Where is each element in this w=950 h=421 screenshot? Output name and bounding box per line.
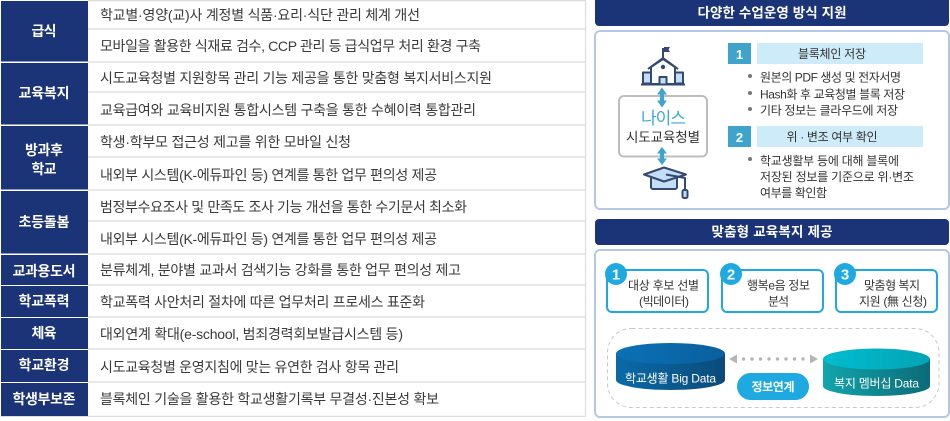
item 2 bullets: 학교생활부 등에 대해 블록에 — [760, 154, 899, 168]
category: 교과용도서: 교과용도서 — [12, 263, 76, 279]
arrow: dotted two-way — [729, 354, 818, 364]
category: 학생부보존 — [1, 383, 88, 416]
table row texts: 학교폭력 사안처리 절차에 따른 업무처리 프로세스 표준화 — [100, 294, 425, 310]
table row texts: 학생·학부모 접근성 제고를 위한 모바일 신청 — [100, 134, 351, 150]
table row texts: 시도교육청별 운영지침에 맞는 유연한 검사 항목 관리 — [100, 359, 399, 375]
category: 학교폭력 — [1, 286, 88, 317]
step 1 — [605, 263, 708, 312]
table row texts — [100, 7, 492, 407]
item 2 title: 위·변조 여부 확인: 2 — [736, 130, 743, 145]
icon: graduation cap — [644, 168, 688, 198]
table row texts: 모바일을 활용한 식재료 검수, CCP 관리 등 급식업무 처리 환경 구축 — [100, 38, 481, 54]
arrow: up and down upper — [657, 88, 667, 108]
box: 나이스 시도교육청별: 나이스 — [641, 109, 686, 128]
category: 학교환경 — [1, 350, 88, 382]
category: 초등돌봄 — [1, 191, 88, 254]
item 2 bullets — [748, 154, 914, 200]
table row texts: 내외부 시스템(K-에듀파인 등) 연계를 통한 업무 편의성 제공 — [100, 231, 437, 247]
category: 급식: 급식 — [32, 23, 56, 39]
step 2: 행복e음 정보 — [747, 278, 810, 292]
category: 체육 — [1, 318, 88, 349]
step 3: 3 — [841, 266, 849, 284]
table row texts: 분류체계, 분야별 교과서 검색기능 강화를 통한 업무 편의성 제고 — [100, 262, 461, 278]
pill: 정보연계: 정보연계 — [752, 380, 794, 394]
heading: 맞춤형 교육복지 제공: 맞춤형 교육복지 제공 — [712, 224, 832, 240]
step 2 — [720, 263, 823, 312]
item 2 title: 위·변조 여부 확인: 위 · 변조 여부 확인 — [786, 130, 878, 144]
item 1 title: 블록체인 저장: 1 — [736, 47, 743, 62]
table row texts: 대외연계 확대(e-school, 범죄경력회보발급시스템 등) — [100, 326, 403, 342]
category: 급식 — [1, 1, 88, 62]
table row texts: 학교별·영양(교)사 계정별 식품·요리·식단 관리 체계 개선 — [100, 7, 420, 23]
table row texts: 교육급여와 교육비지원 통합시스템 구축을 통한 수혜이력 통합관리 — [100, 102, 476, 118]
item 1 bullets: 기타 정보는 클라우드에 저장 — [760, 104, 898, 118]
step 3: 맞춤형 복지 — [864, 278, 920, 292]
box: 나이스 시도교육청별 — [619, 96, 707, 156]
category: 학생부보존: 학생부보존 — [12, 391, 76, 407]
step 1: (빅데이터) — [639, 294, 689, 308]
item 1 title: 블록체인 저장: 블록체인 저장 — [798, 47, 866, 61]
step 1: 대상 후보 선별 — [628, 278, 699, 292]
panel: feature table — [1, 0, 586, 417]
cylinder: 복지 멤버십 Data — [823, 348, 930, 396]
category: 방과후 학교 — [1, 126, 88, 190]
category: 학교환경: 학교환경 — [18, 357, 70, 373]
category: 교육복지: 교육복지 — [18, 85, 70, 101]
item 2 title: 위·변조 여부 확인 — [728, 126, 923, 147]
category: 학교폭력: 학교폭력 — [18, 293, 70, 309]
step 3: 지원 (無 신청) — [859, 294, 927, 308]
pill: 정보연계 — [737, 373, 809, 400]
category: 체육: 체육 — [32, 325, 57, 341]
panel: 수업운영 방식 — [595, 31, 949, 209]
category: 초등돌봄: 초등돌봄 — [18, 214, 70, 230]
step 3 — [834, 263, 937, 312]
step 2: 2 — [727, 266, 735, 284]
cylinder: 학교생활 Big Data — [616, 343, 725, 390]
item 2 bullets: 여부를 확인함 — [760, 186, 827, 200]
category: 교육복지 — [1, 63, 88, 124]
step 2: 분석 — [768, 294, 789, 308]
icon: school — [641, 47, 685, 84]
panel: 맞춤형 교육복지 — [595, 250, 949, 417]
item 1 title: 블록체인 저장 — [728, 43, 923, 64]
item 1 bullets: 원본의 PDF 생성 및 전자서명 — [760, 70, 901, 84]
item 1 bullets: Hash화 후 교육청별 블록 저장 — [760, 88, 905, 102]
category: 방과후 학교: 학교 — [32, 161, 57, 177]
arrow: up and down lower — [657, 147, 667, 165]
cylinder: 학교생활 Big Data: 학교생활 Big Data — [625, 372, 716, 386]
item 2 bullets: 저장된 정보를 기준으로 위·변조 — [760, 170, 914, 184]
table row texts: 내외부 시스템(K-에듀파인 등) 연계를 통한 업무 편의성 제공 — [100, 167, 437, 183]
category: 방과후 학교: 방과후 — [25, 142, 63, 158]
table row texts: 시도교육청별 지원항목 관리 기능 제공을 통한 맞춤형 복지서비스지원 — [100, 70, 492, 86]
heading: 맞춤형 교육복지 제공 — [595, 219, 949, 245]
table row texts: 범정부수요조사 및 만족도 조사 기능 개선을 통한 수기문서 최소화 — [100, 199, 467, 215]
heading: 다양한 수업운영 방식 지원 — [595, 0, 949, 26]
heading: 다양한 수업운영 방식 지원: 다양한 수업운영 방식 지원 — [698, 6, 846, 20]
category: 교과용도서 — [1, 255, 88, 285]
data link diagram — [608, 328, 939, 408]
table row texts: 블록체인 기술을 활용한 학교생활기록부 무결성·진본성 확보 — [100, 391, 439, 407]
item 1 bullets — [748, 70, 905, 118]
cylinder: 복지 멤버십 Data: 복지 멤버십 Data — [834, 376, 919, 390]
step 1: 1 — [612, 266, 620, 284]
box: 나이스 시도교육청별: 시도교육청별 — [626, 130, 700, 145]
